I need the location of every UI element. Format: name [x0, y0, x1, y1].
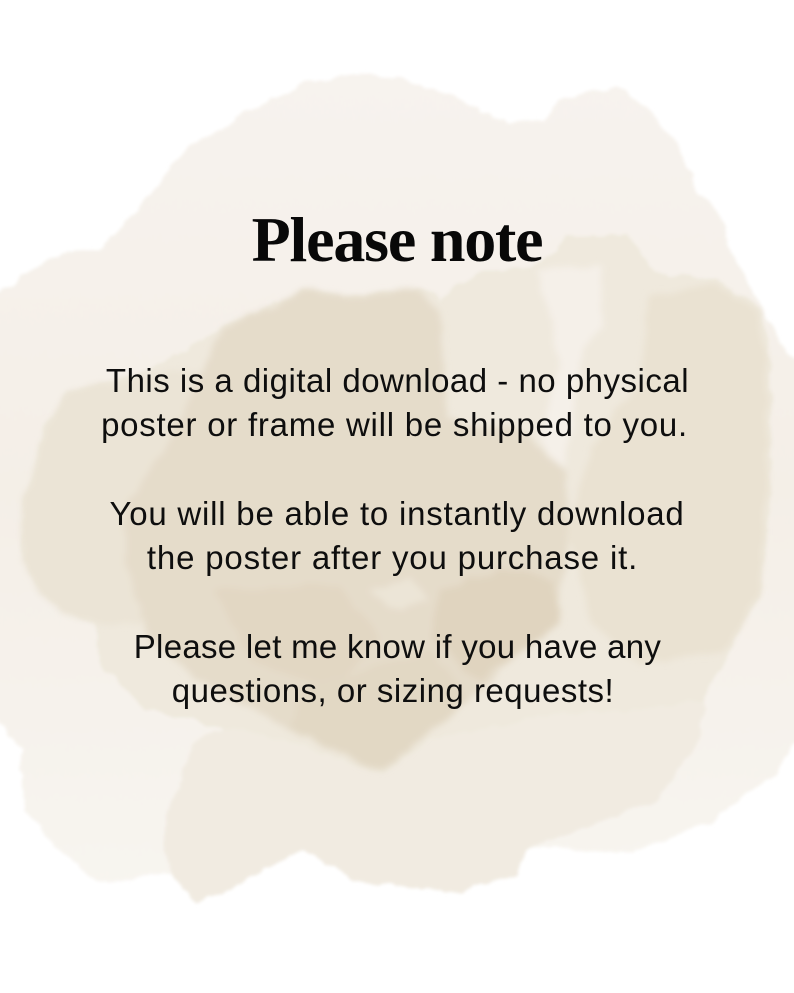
text block: instant download notice: the poster after you purchase it. — [147, 539, 638, 576]
text block: instant download notice: You will be able to instantly download — [109, 495, 685, 532]
text block: questions notice: questions, or sizing requests! — [172, 672, 614, 709]
text block: questions notice: Please let me know if you have any — [134, 628, 661, 665]
text block: digital download notice — [101, 362, 689, 443]
text block: digital download notice: poster or frame will be shipped to you. — [101, 406, 688, 443]
text block: digital download notice: This is a digital download - no physical — [106, 362, 689, 399]
text block: questions notice — [134, 628, 661, 709]
title: Please note — [252, 204, 542, 275]
text block: instant download notice — [109, 495, 685, 576]
